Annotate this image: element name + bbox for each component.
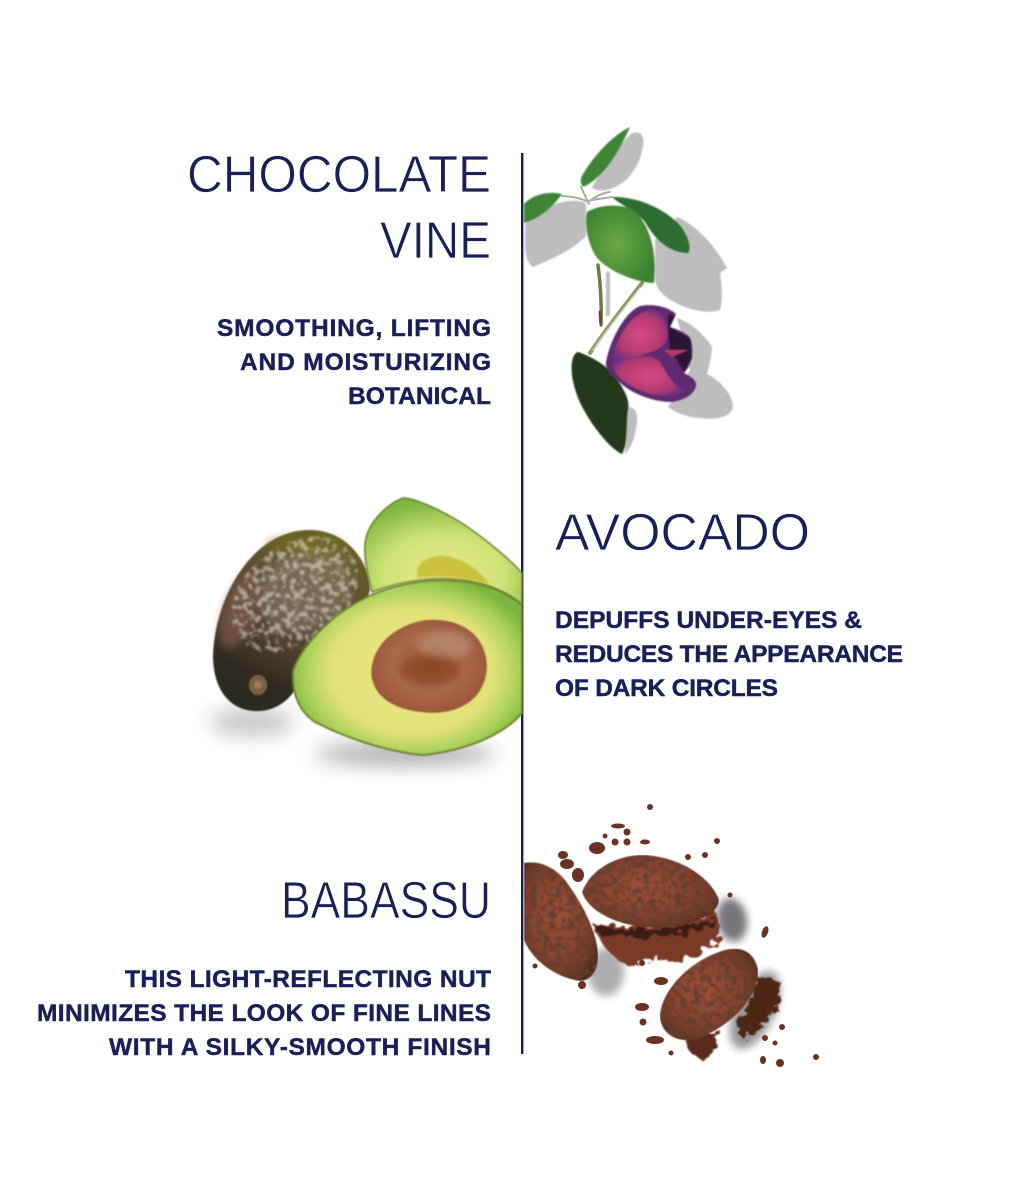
description: avocado <box>555 607 903 702</box>
photo: cacao beans <box>524 804 819 1067</box>
description: chocolate vine: BOTANICAL <box>348 383 491 410</box>
description: babassu <box>37 966 491 1061</box>
avocado front half with pit <box>293 580 522 755</box>
heading: chocolate vine: VINE <box>380 212 491 270</box>
cacao bean top <box>582 855 719 928</box>
description: babassu: MINIMIZES THE LOOK OF FINE LINES <box>37 1000 491 1027</box>
avocado back half <box>365 498 522 605</box>
section: babassu text <box>37 872 491 1061</box>
description: avocado: DEPUFFS UNDER-EYES & <box>555 607 862 634</box>
section: chocolate vine text <box>187 146 491 410</box>
avocado ground shadow <box>210 708 495 765</box>
bean shadows <box>588 896 791 1057</box>
heading: babassu: BABASSU <box>281 872 491 930</box>
section: avocado text <box>555 504 903 702</box>
photo: chocolate vine plant <box>524 127 733 454</box>
heading: chocolate vine: CHOCOLATE <box>187 146 491 204</box>
vertical divider line <box>521 153 523 1054</box>
description: babassu: THIS LIGHT-REFLECTING NUT <box>125 966 491 993</box>
cacao bean bottom <box>660 949 758 1040</box>
cocoa powder <box>594 912 782 1060</box>
plant shadows <box>525 132 733 454</box>
plant leaves <box>524 127 690 454</box>
heading: chocolate vine <box>187 146 491 270</box>
plant stems <box>562 187 642 353</box>
cocoa crumbs <box>532 804 819 1067</box>
heading: avocado: AVOCADO <box>555 504 810 562</box>
description: avocado: OF DARK CIRCLES <box>555 675 778 702</box>
cacao bean left <box>524 862 598 981</box>
description: chocolate vine <box>217 315 491 410</box>
description: avocado: REDUCES THE APPEARANCE <box>555 641 903 668</box>
description: chocolate vine: AND MOISTURIZING <box>240 349 491 376</box>
description: babassu: WITH A SILKY-SMOOTH FINISH <box>109 1034 491 1061</box>
plant flower <box>606 305 696 402</box>
photo: avocado <box>209 498 522 765</box>
whole avocado <box>209 513 381 711</box>
description: chocolate vine: SMOOTHING, LIFTING <box>217 315 491 342</box>
